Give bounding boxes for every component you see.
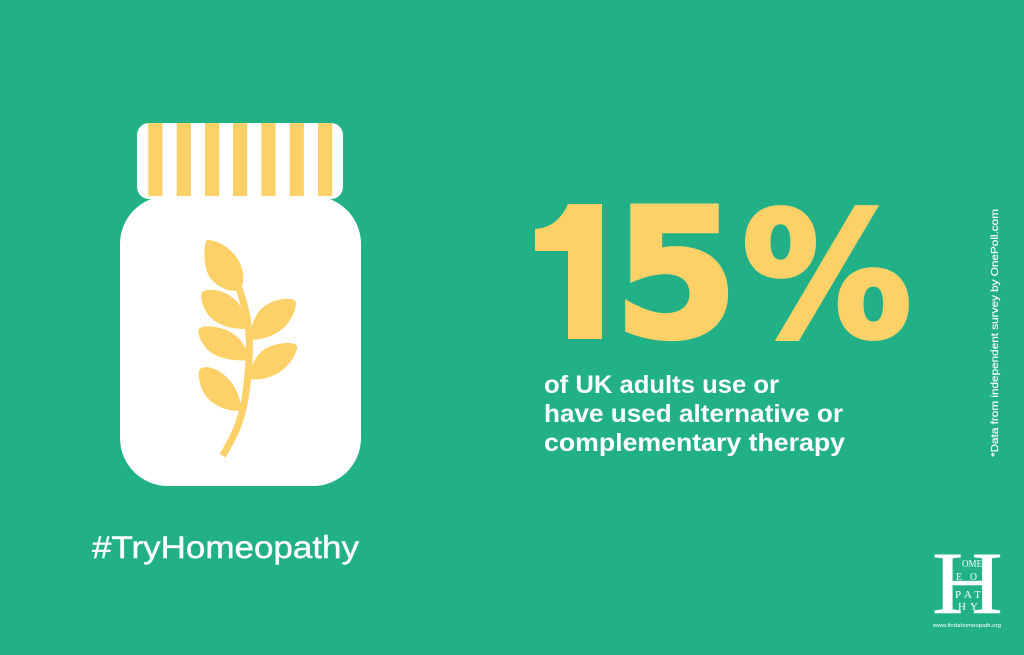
icon: wheat sprig bbox=[199, 241, 296, 456]
logo letters bbox=[955, 558, 982, 613]
big statistic: 15%: % bbox=[742, 176, 912, 377]
logo letters: HY bbox=[958, 601, 978, 613]
jar body bbox=[120, 196, 361, 486]
logo large H: H bbox=[932, 535, 1003, 633]
logo letters: O bbox=[970, 571, 977, 583]
statistic description bbox=[544, 371, 845, 457]
big statistic: 15%: 5 bbox=[614, 172, 738, 379]
statistic description: complementary therapy bbox=[544, 429, 845, 457]
infographic canvas bbox=[92, 123, 1001, 628]
icon: jar with wheat sprig bbox=[120, 123, 361, 486]
logo website: www.findahomeopath.org bbox=[933, 623, 1001, 629]
jar lid with stripes bbox=[137, 123, 343, 199]
logo letters: OME bbox=[962, 558, 982, 570]
logo letters: E bbox=[956, 571, 962, 583]
logo: Homeopathy bbox=[932, 535, 1003, 633]
hashtag: #TryHomeopathy bbox=[92, 529, 359, 565]
logo letters: PAT bbox=[955, 589, 981, 601]
statistic description: of UK adults use or bbox=[544, 371, 779, 399]
big statistic: 15% bbox=[535, 204, 909, 342]
big statistic: 15%: 1 bbox=[512, 170, 644, 382]
statistic description: have used alternative or bbox=[544, 400, 843, 428]
source footnote: *Data from independent survey by OnePoll.com bbox=[989, 209, 1001, 457]
